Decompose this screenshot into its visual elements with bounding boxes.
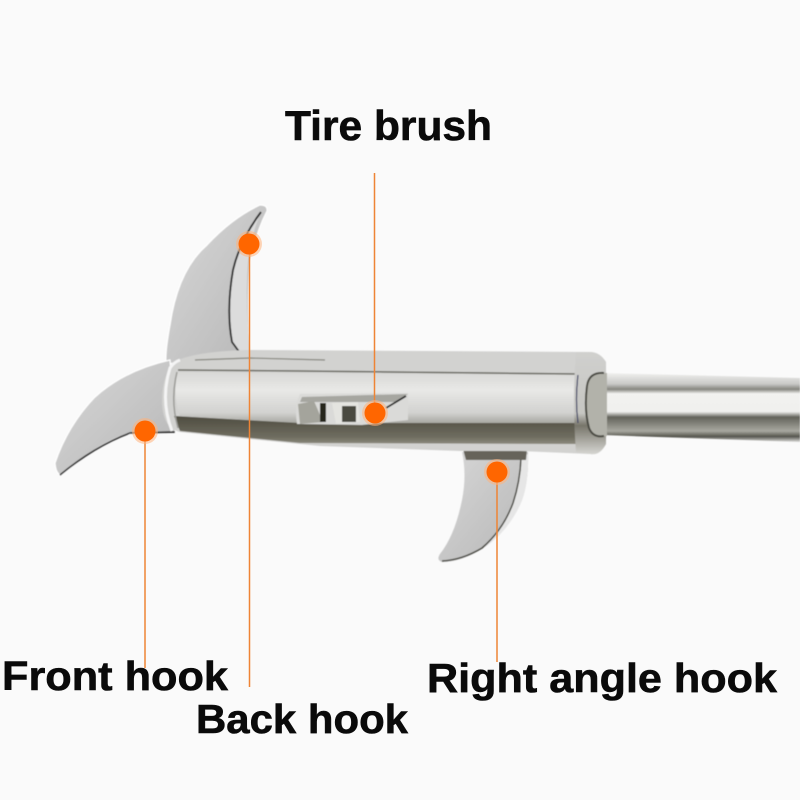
body left cap bbox=[165, 360, 180, 431]
back hook blade bbox=[166, 205, 267, 364]
body dark band bbox=[174, 416, 578, 444]
right angle hook bbox=[438, 452, 528, 562]
tool illustration bbox=[55, 205, 800, 562]
label: right angle hook: Right angle hook bbox=[427, 655, 777, 701]
main body bbox=[162, 350, 606, 454]
label: tire brush: Tire brush bbox=[285, 102, 492, 149]
callout lines bbox=[145, 173, 497, 687]
marker: tire brush bbox=[362, 400, 388, 426]
rod bbox=[603, 373, 800, 442]
label: front hook: Front hook bbox=[2, 653, 228, 699]
front hook blade bbox=[55, 360, 175, 475]
back hook inner strip bbox=[229, 212, 261, 354]
body highlight band bbox=[175, 372, 578, 423]
marker: front hook bbox=[132, 418, 158, 444]
body groove lines bbox=[178, 370, 578, 374]
slot bbox=[296, 393, 408, 425]
marker: back hook bbox=[236, 231, 262, 257]
label: back hook: Back hook bbox=[196, 696, 408, 742]
back hook edge bbox=[229, 212, 261, 353]
thread collar bbox=[587, 373, 607, 436]
marker: right angle hook bbox=[484, 459, 510, 485]
nut end bbox=[574, 352, 606, 454]
front hook edge bbox=[60, 432, 175, 475]
